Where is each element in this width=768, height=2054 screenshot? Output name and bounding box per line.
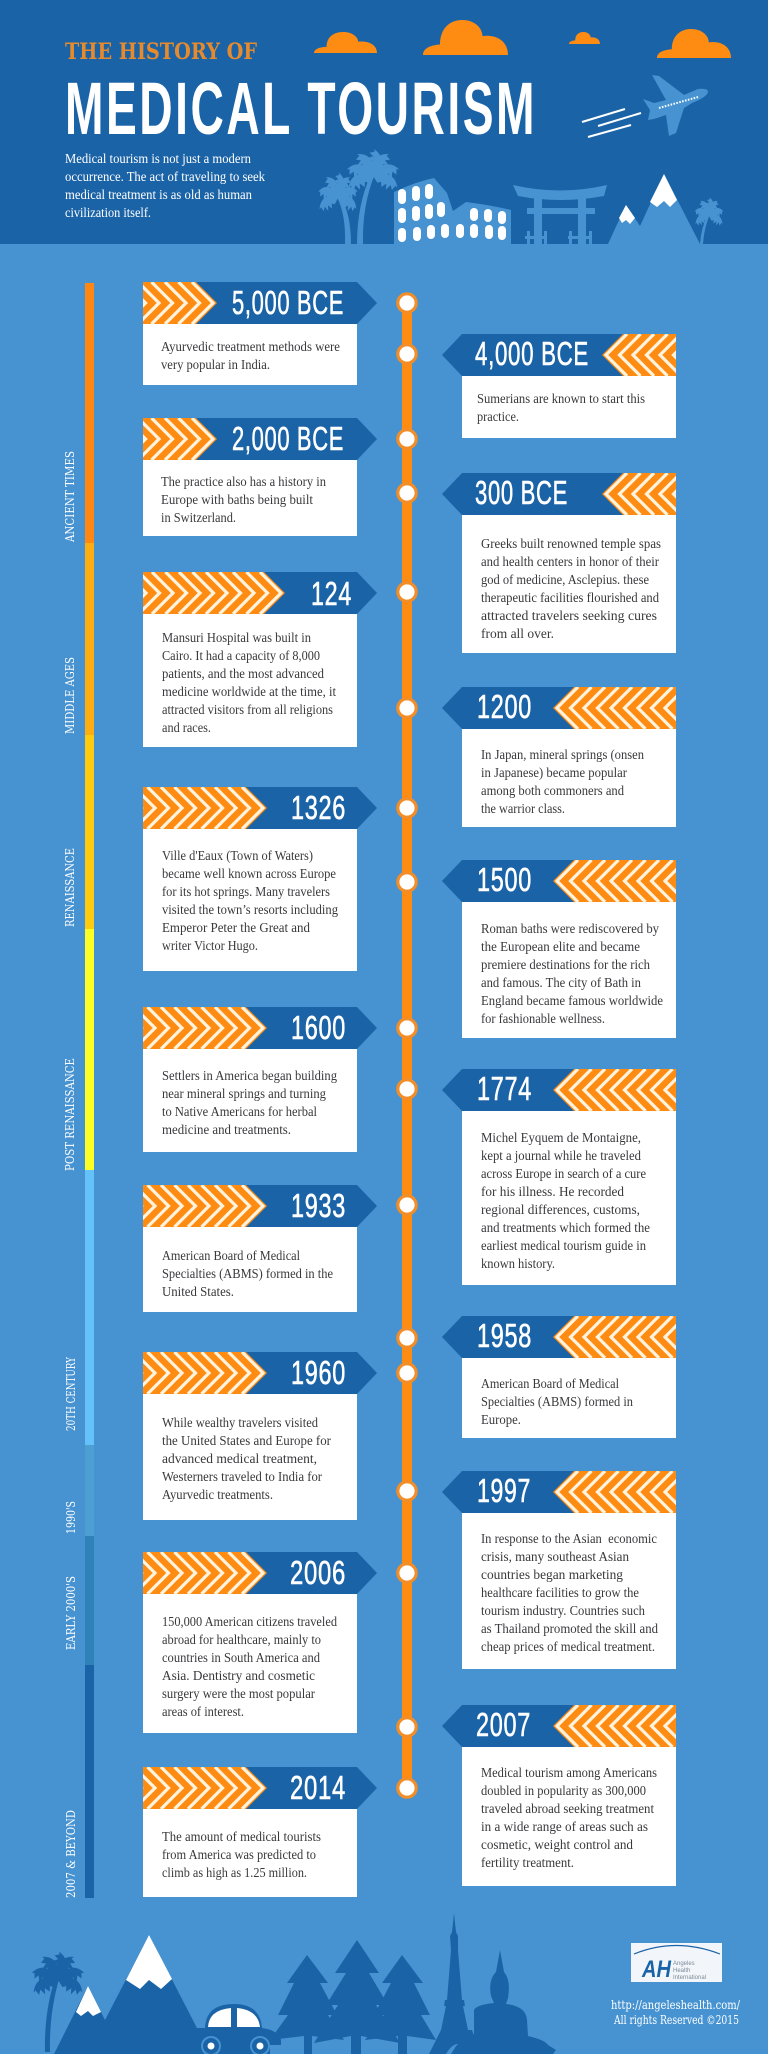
card: 1326 xyxy=(143,787,377,971)
card: 2007: fertility treatment. xyxy=(481,1855,574,1870)
era labels: 20TH CENTURY xyxy=(63,1356,78,1431)
card: 1200: In Japan, mineral springs (onsen xyxy=(481,747,644,763)
intro text: medical treatment is as old as human xyxy=(65,188,252,203)
card: 1774: for his illness. He recorded xyxy=(481,1184,624,1199)
logo: International xyxy=(673,1975,706,1981)
card: 1500: Roman baths were rediscovered by xyxy=(481,921,659,936)
card: 2,000 BCE: Europe with baths being built xyxy=(161,492,313,507)
era labels: 2007 & BEYOND xyxy=(63,1810,78,1898)
card: 2007: doubled in popularity as 300,000 xyxy=(481,1783,646,1798)
era bar xyxy=(85,283,94,1898)
card: 1500: England became famous worldwide xyxy=(481,993,663,1008)
card: 1960 xyxy=(143,1352,377,1520)
icon: colosseum xyxy=(394,178,511,244)
icon: mountains xyxy=(54,1935,210,2054)
card: 1933: 1933 xyxy=(291,1187,346,1224)
card: 2006: 2006 xyxy=(290,1554,346,1591)
card: 124: 124 xyxy=(311,575,352,612)
icon: buddha xyxy=(451,1950,556,2054)
icon: mountains xyxy=(608,174,700,244)
era labels: 1990'S xyxy=(63,1501,78,1534)
card: 1500: for fashionable wellness. xyxy=(481,1011,605,1026)
card: 1960: the United States and Europe for xyxy=(162,1433,331,1448)
card: 2006: 150,000 American citizens traveled xyxy=(162,1614,337,1629)
card: 2006: countries in South America and xyxy=(162,1650,320,1665)
card: 1958: Specialties (ABMS) formed in xyxy=(481,1394,633,1410)
icon: airplane xyxy=(582,75,708,137)
card: 1326: visited the town’s resorts including xyxy=(162,902,338,917)
card: 300 BCE: god of medicine, Asclepius. these xyxy=(481,572,649,587)
card: 4,000 BCE: practice. xyxy=(477,409,519,424)
card: 1600: to Native Americans for herbal xyxy=(162,1104,317,1119)
era labels: ANCIENT TIMES xyxy=(62,451,77,543)
card: 124: Cairo. It had a capacity of 8,000 xyxy=(162,648,320,663)
card: 1774: 1774 xyxy=(477,1070,532,1107)
card: 124 xyxy=(143,572,377,747)
card: 1997: countries began marketing xyxy=(481,1567,623,1582)
skyline illustration xyxy=(317,149,725,244)
icon: palm trees xyxy=(317,149,401,244)
card: 2007: 2007 xyxy=(476,1706,531,1743)
card: 1600 xyxy=(143,1007,377,1152)
card: 1774 xyxy=(442,1069,676,1285)
card: 1774: earliest medical tourism guide in xyxy=(481,1238,646,1253)
card: 2007 xyxy=(442,1705,676,1886)
card: 5,000 BCE: Ayurvedic treatment methods were xyxy=(161,339,340,354)
card: 2006: Asia. Dentistry and cosmetic xyxy=(162,1668,315,1683)
card: 2014: The amount of medical tourists xyxy=(162,1829,321,1844)
card: 1774: known history. xyxy=(481,1256,555,1271)
clouds xyxy=(314,20,731,58)
era labels: RENAISSANCE xyxy=(62,848,77,927)
card: 2,000 BCE: 2,000 BCE xyxy=(232,420,344,457)
card: 1997: In response to the Asian economic xyxy=(481,1531,657,1546)
card: 1774: Michel Eyquem de Montaigne, xyxy=(481,1130,641,1145)
intro text: civilization itself. xyxy=(65,206,151,221)
card: 2007: traveled abroad seeking treatment xyxy=(481,1801,654,1816)
card: 1774: across Europe in search of a cure xyxy=(481,1166,646,1181)
card: 124: attracted visitors from all religions xyxy=(162,702,333,717)
intro text xyxy=(65,152,265,221)
card: 1997: tourism industry. Countries such xyxy=(481,1603,645,1618)
card: 1600: Settlers in America began building xyxy=(162,1068,337,1083)
card: 1326: 1326 xyxy=(291,789,346,826)
card: 4,000 BCE: 4,000 BCE xyxy=(475,335,589,372)
card: 1500: 1500 xyxy=(477,861,532,898)
card: 1933: American Board of Medical xyxy=(162,1248,300,1263)
card: 2014: climb as high as 1.25 million. xyxy=(162,1865,307,1880)
card: 1500 xyxy=(442,860,676,1038)
footer illustration xyxy=(30,1913,556,2054)
card: 2014: from America was predicted to xyxy=(162,1847,316,1862)
card: 1997: 1997 xyxy=(477,1472,531,1509)
card: 2007: Medical tourism among Americans xyxy=(481,1765,657,1780)
card: 1997: healthcare facilities to grow the xyxy=(481,1585,639,1600)
card: 2007: in a wide range of areas such as xyxy=(481,1819,648,1834)
card: 1933: Specialties (ABMS) formed in the xyxy=(162,1266,333,1282)
card: 124: medicine worldwide at the time, it xyxy=(162,684,336,699)
intro text: Medical tourism is not just a modern xyxy=(65,152,251,167)
card: 4,000 BCE: Sumerians are known to start this xyxy=(477,391,645,406)
card: 1774: and treatments which formed the xyxy=(481,1220,650,1235)
card: 2014: 2014 xyxy=(290,1769,346,1806)
era labels: POST RENAISSANCE xyxy=(62,1058,77,1171)
card: 124: patients, and the most advanced xyxy=(162,666,324,681)
footer credits: http://angeleshealth.com/ xyxy=(611,1998,741,2012)
card: 2006: abroad for healthcare, mainly to xyxy=(162,1632,321,1647)
card: 1500: the European elite and became xyxy=(481,939,640,954)
card: 2014 xyxy=(143,1767,377,1897)
card: 1600: near mineral springs and turning xyxy=(162,1086,326,1101)
card: 2006 xyxy=(143,1552,377,1733)
card: 300 BCE: and health centers in honor of their xyxy=(481,554,659,569)
logo: AH xyxy=(641,1956,672,1983)
card: 1500: and famous. The city of Bath in xyxy=(481,975,641,990)
card: 1960: advanced medical treatment, xyxy=(162,1451,317,1466)
card: 1960: Westerners traveled to India for xyxy=(162,1469,322,1484)
central timeline xyxy=(398,294,416,1797)
heading: the history of: THE HISTORY OF xyxy=(65,39,257,65)
card: 300 BCE: therapeutic facilities flourished and xyxy=(481,590,659,605)
card: 4,000 BCE xyxy=(442,334,676,438)
card: 1500: premiere destinations for the rich xyxy=(481,957,650,972)
card: 1200: 1200 xyxy=(477,688,532,725)
card: 1958: 1958 xyxy=(477,1317,532,1354)
card: 1326: for its hot springs. Many travelers xyxy=(162,884,330,899)
card: 1997: cheap prices of medical treatment. xyxy=(481,1639,655,1654)
card: 1326: Ville d'Eaux (Town of Waters) xyxy=(162,848,313,864)
card: 300 BCE: attracted travelers seeking cures xyxy=(481,608,657,623)
card: 1960: 1960 xyxy=(291,1354,346,1391)
card: 2,000 BCE xyxy=(143,418,377,536)
icon: pine trees xyxy=(270,1940,436,2054)
card: 1933: United States. xyxy=(162,1284,234,1299)
card: 5,000 BCE: 5,000 BCE xyxy=(232,284,344,321)
icon: palm xyxy=(30,1951,86,2052)
card: 1997: as Thailand promoted the skill and xyxy=(481,1621,658,1636)
card: 300 BCE: 300 BCE xyxy=(475,474,568,511)
card: 1774: kept a journal while he traveled xyxy=(481,1148,641,1163)
era labels xyxy=(62,451,78,1898)
card: 2,000 BCE: in Switzerland. xyxy=(161,510,236,525)
icon: eiffel tower xyxy=(429,1913,480,2054)
icon: car xyxy=(196,2004,281,2054)
logo xyxy=(631,1943,722,1983)
icon: small palm xyxy=(693,197,725,244)
card: 1933 xyxy=(143,1185,377,1312)
era labels: MIDDLE AGES xyxy=(62,657,77,734)
card: 1960: While wealthy travelers visited xyxy=(162,1415,318,1430)
card: 2007: cosmetic, weight control and xyxy=(481,1837,633,1852)
card: 1200: the warrior class. xyxy=(481,801,565,816)
card: 2,000 BCE: The practice also has a history in xyxy=(161,474,326,489)
card: 1600: medicine and treatments. xyxy=(162,1122,291,1137)
card: 1200 xyxy=(442,687,676,827)
card: 300 BCE: Greeks built renowned temple spas xyxy=(481,536,661,551)
logo: Angeles xyxy=(673,1961,695,1967)
card: 1997 xyxy=(442,1471,676,1669)
card: 2006: surgery were the most popular xyxy=(162,1686,315,1701)
card: 5,000 BCE xyxy=(143,282,377,385)
card: 1326: writer Victor Hugo. xyxy=(162,938,258,953)
footer credits xyxy=(611,1998,741,2027)
card: 300 BCE: from all over. xyxy=(481,626,554,641)
logo: Health xyxy=(673,1968,690,1974)
header banner xyxy=(0,0,768,244)
card: 124: Mansuri Hospital was built in xyxy=(162,630,311,645)
card: 1960: Ayurvedic treatments. xyxy=(162,1487,273,1502)
card: 1958: Europe. xyxy=(481,1412,521,1427)
card: 1200: in Japanese) became popular xyxy=(481,765,627,781)
card: 1600: 1600 xyxy=(291,1009,346,1046)
icon: torii gate xyxy=(513,185,607,244)
card: 1958: American Board of Medical xyxy=(481,1376,619,1391)
card: 124: and races. xyxy=(162,720,211,735)
card: 1958 xyxy=(442,1316,676,1438)
card: 300 BCE xyxy=(442,473,676,653)
card: 1997: crisis, many southeast Asian xyxy=(481,1549,629,1564)
era labels: EARLY 2000'S xyxy=(63,1576,78,1650)
card: 1200: among both commoners and xyxy=(481,783,624,798)
card: 1326: became well known across Europe xyxy=(162,866,336,881)
card: 2006: areas of interest. xyxy=(162,1704,244,1719)
card: 1326: Emperor Peter the Great and xyxy=(162,920,310,935)
intro text: occurrence. The act of traveling to seek xyxy=(65,170,265,185)
card: 1774: regional differences, customs, xyxy=(481,1202,640,1217)
card: 5,000 BCE: very popular in India. xyxy=(161,357,270,372)
era sidebar xyxy=(62,283,94,1898)
